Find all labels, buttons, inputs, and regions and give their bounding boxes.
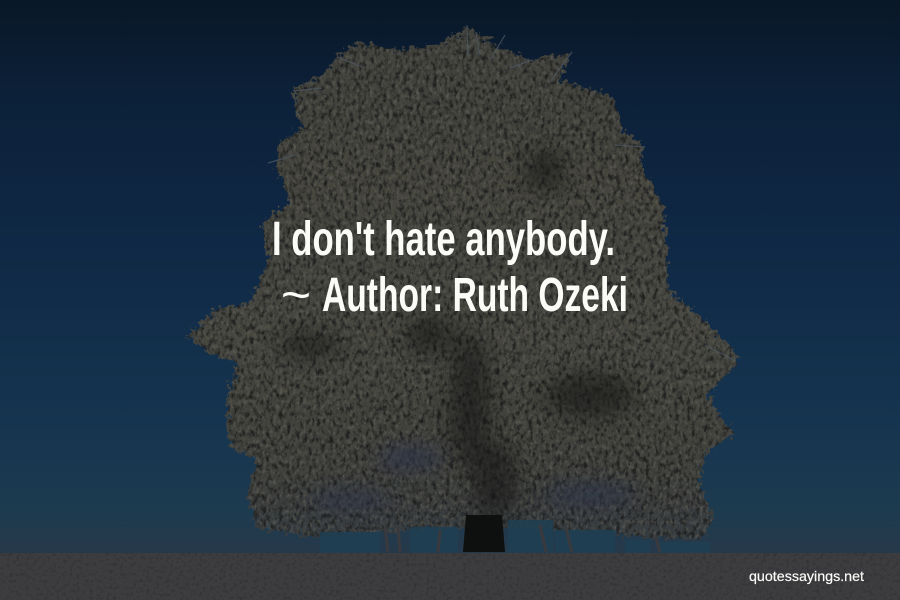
quote text: I don't hate anybody.	[272, 213, 615, 266]
branch streaks below crown	[385, 525, 660, 552]
tree	[180, 25, 745, 553]
author line	[281, 269, 628, 322]
foliage shadow patches	[280, 150, 635, 520]
sky gaps near the base of the crown	[320, 520, 710, 553]
watermark: quotessayings.net	[749, 568, 864, 584]
author name: Author: Ruth Ozeki	[322, 269, 628, 322]
twig spikes at crown edge	[268, 25, 734, 360]
bluish patches in lower crown	[310, 446, 635, 509]
tree crown silhouette	[187, 27, 737, 540]
foliage texture	[180, 25, 745, 545]
trunk	[463, 515, 505, 552]
tilde: ~	[281, 269, 311, 322]
ground	[0, 553, 900, 600]
